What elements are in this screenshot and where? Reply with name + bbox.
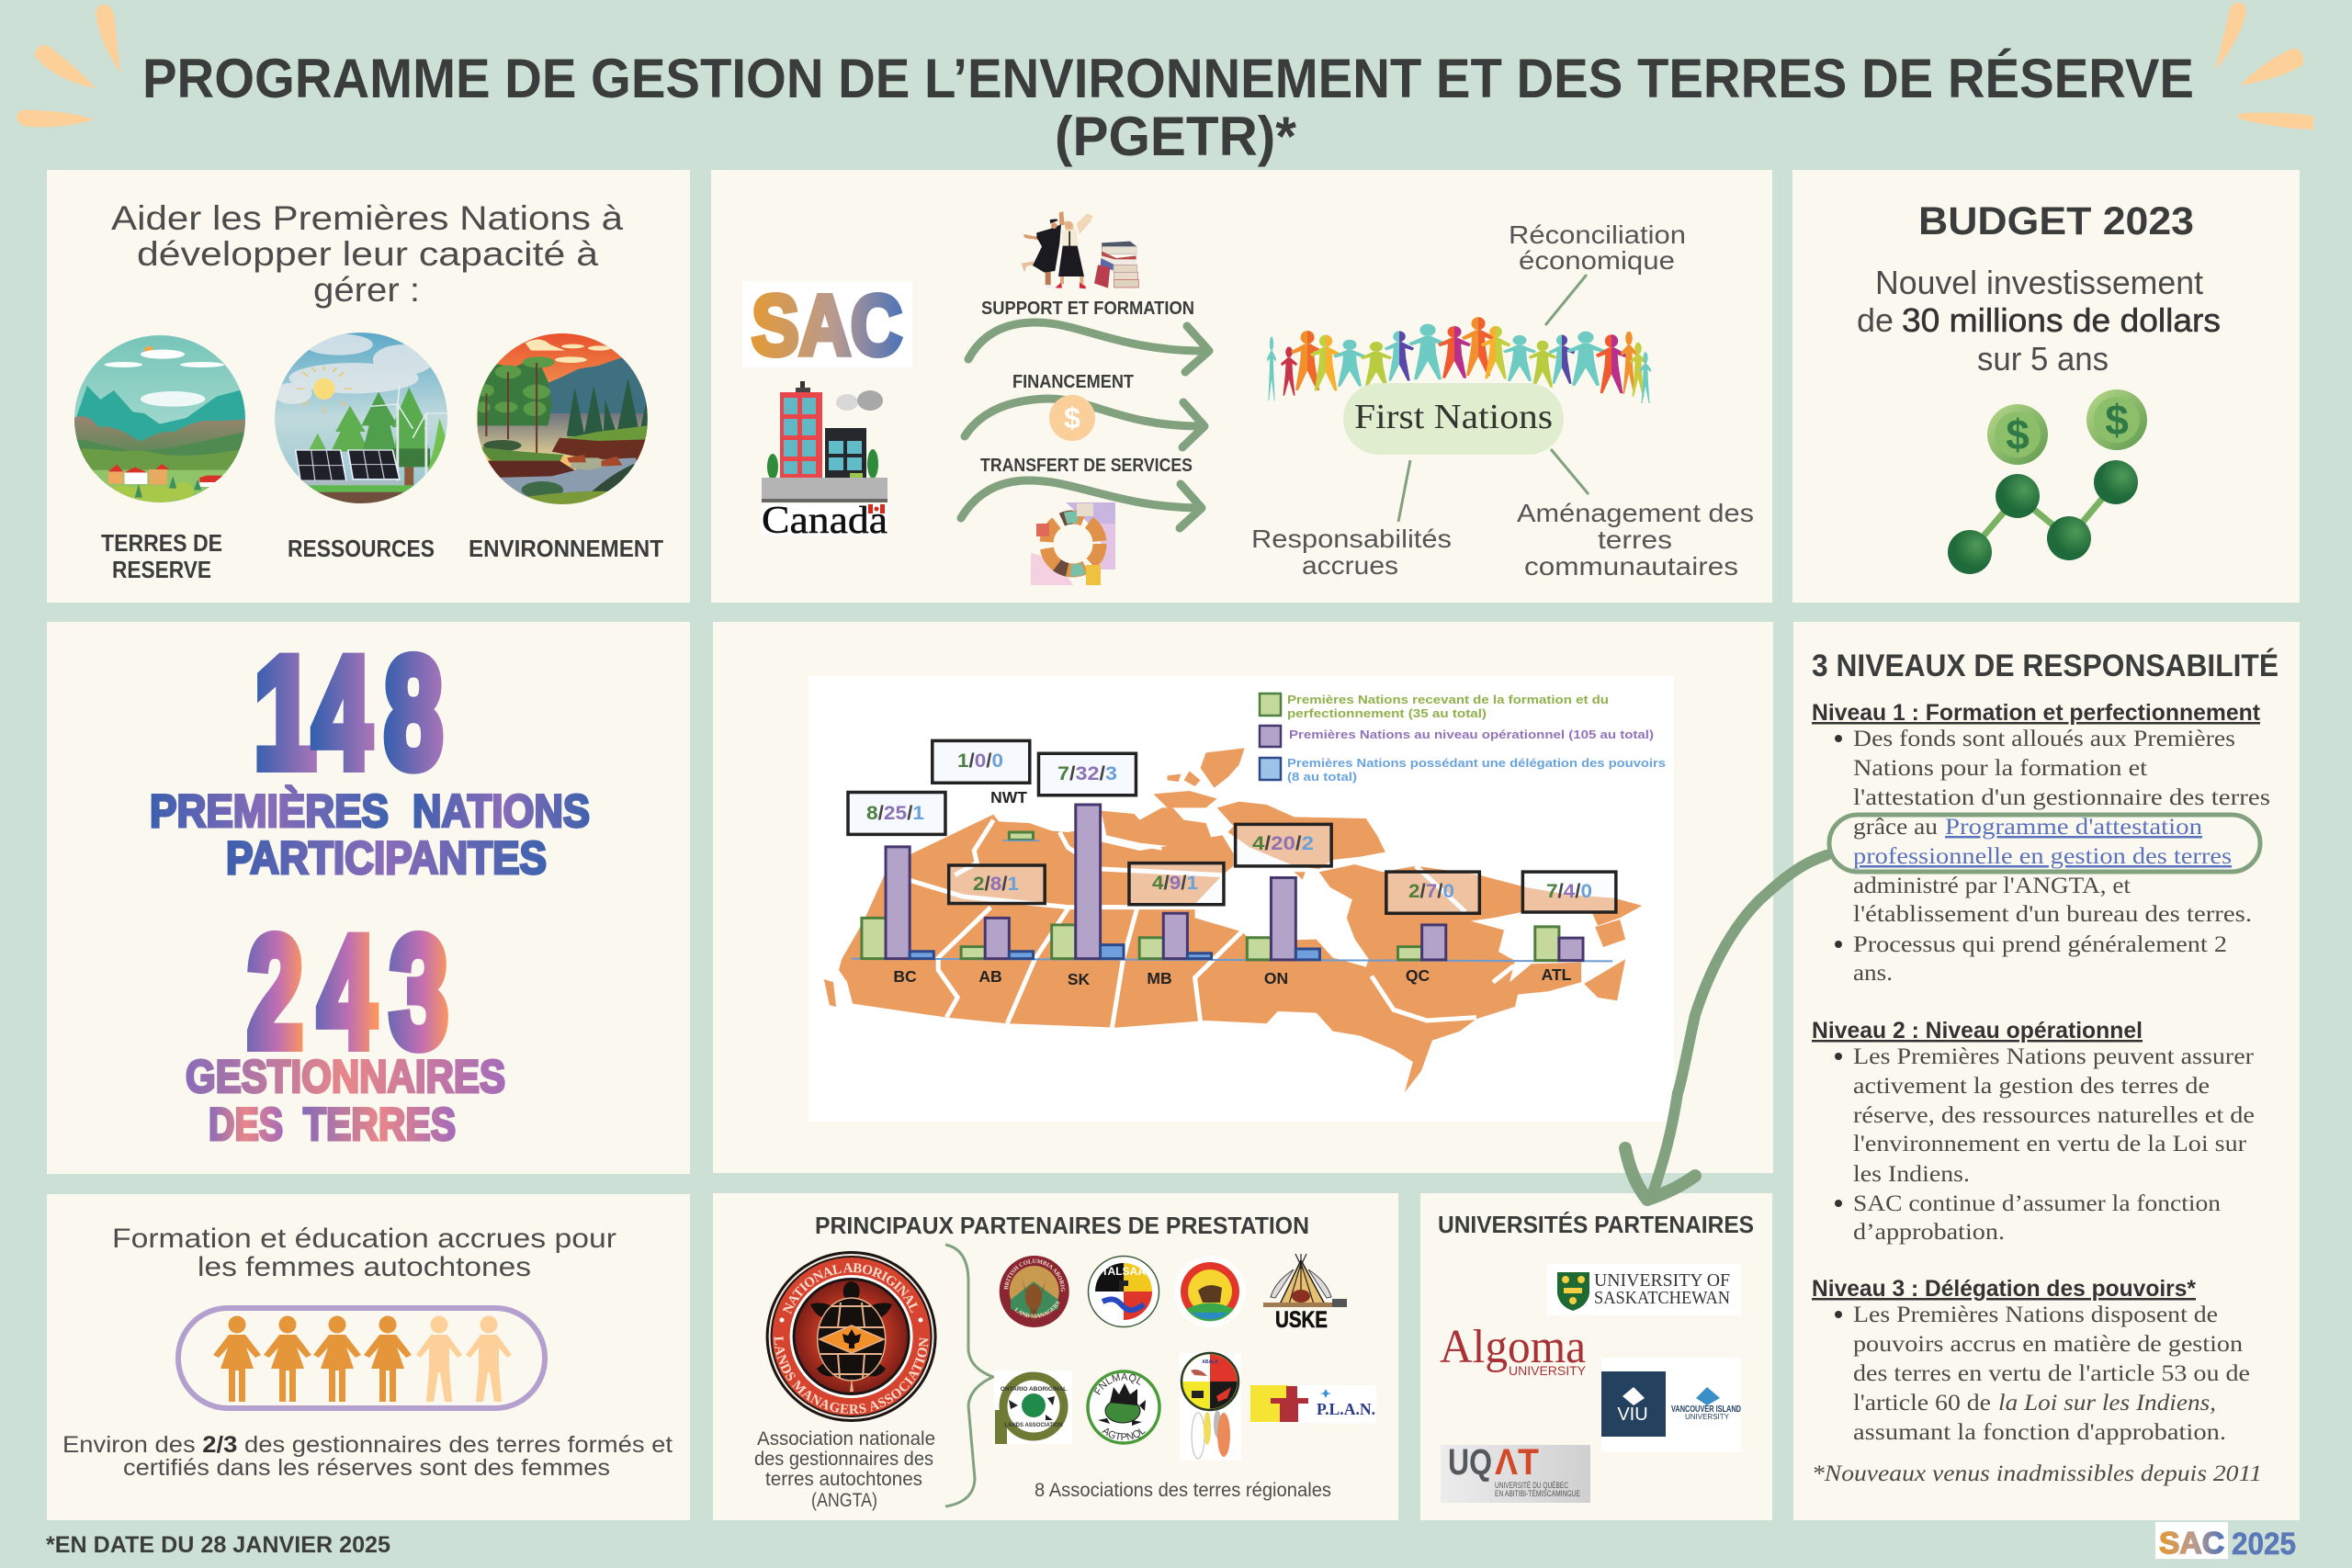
icon: money growth chart: $ [2006, 411, 2030, 458]
data labels: box values: 7/32/3 [1057, 763, 1117, 784]
data labels: regions: AB [978, 967, 1002, 986]
text: ANGTA caption: terres autochtones [765, 1469, 922, 1490]
data labels: regions: ATL [1542, 965, 1572, 984]
logo: SAC 2025: 2025 [2232, 1527, 2296, 1562]
callout: responsabilites [1251, 525, 1452, 580]
label: ressources: RESSOURCES [288, 535, 435, 562]
label: premieres nations participantes [150, 785, 590, 884]
logo: PLAN: P.L.A.N. [1317, 1400, 1375, 1418]
logo: UQAT: UQ [1448, 1442, 1492, 1483]
stat: 148: 4 [312, 625, 371, 801]
icon: circle of hands [1031, 502, 1115, 585]
text: niveau 1: grâce au [1853, 815, 1939, 840]
panel: flows to First Nations [711, 170, 1772, 603]
stat: 148: 8 [384, 625, 443, 801]
arrow: transfert de services [961, 480, 1202, 528]
callout: reconciliation [1509, 220, 1686, 275]
logo: Ontario lands association: LANDS ASSOCIATION [1004, 1423, 1063, 1428]
callout: responsabilites: accrues [1302, 551, 1398, 580]
callout: amenagement: Aménagement des [1517, 499, 1754, 527]
icon: government building [762, 381, 888, 502]
text: niveau 1: Des fonds sont alloués aux Premières [1853, 727, 2235, 751]
text: two thirds: Environ des 2/3 des gestionnaires des terres formés et [62, 1432, 673, 1458]
label: terres de reserve [101, 529, 222, 583]
logo: SAC: SAC [752, 277, 902, 373]
footnote: nouveaux venus: *Nouveaux venus inadmissibles depuis 2011 [1812, 1461, 2262, 1486]
label: terres de reserve: RESERVE [112, 556, 211, 583]
decorative sunburst right [2215, 3, 2313, 130]
heading: formation femmes: Formation et éducation accrues pour [112, 1224, 616, 1254]
callout: amenagement: communautaires [1524, 552, 1738, 581]
label: terres de reserve: TERRES DE [101, 529, 222, 557]
text: niveau 1: administré par l'ANGTA, et [1853, 874, 2131, 898]
logo: SAC 2025: SAC [2159, 1526, 2224, 1560]
logo: ANGTA: LANDS MANAGERS ASSOCIATION [774, 1336, 929, 1415]
label: environnement: ENVIRONNEMENT [469, 535, 663, 562]
data labels: box values: 2/7/0 [1408, 881, 1454, 902]
title [142, 48, 2194, 167]
title: (PGETR)* [1055, 106, 1297, 167]
icon: terres de reserve landscape [72, 333, 247, 507]
illustration: people chain [1267, 317, 1651, 403]
text: niveau 3: l'article 60 de [1853, 1391, 1991, 1416]
text: investment [1857, 264, 2221, 378]
logo: TAL SAA [1088, 1257, 1159, 1326]
logo: TAL SAA: TALSAA [1102, 1265, 1146, 1278]
logo: Algoma: UNIVERSITY [1509, 1363, 1587, 1378]
text: niveau 3 [1812, 1276, 2250, 1445]
text: niveau 3: Les Premières Nations disposent de [1853, 1303, 2218, 1327]
logo: USKE [1263, 1254, 1347, 1333]
text: niveau 2: les Indiens. [1853, 1162, 1970, 1187]
text: two thirds: certifiés dans les réserves sont des femmes [123, 1455, 610, 1481]
logo: University of Saskatchewan: UNIVERSITY OF [1594, 1270, 1730, 1291]
data labels: box values: 7/4/0 [1546, 881, 1592, 902]
text: niveau 1 [1812, 700, 2270, 986]
logo: prairie nation [1174, 1256, 1246, 1327]
text: niveau 2: réserve, des ressources naturelles et de [1853, 1103, 2255, 1128]
text: investment: 30 millions de dollars [1902, 301, 2221, 339]
stat: 243 [247, 904, 448, 1080]
stat: 148: 1 [254, 625, 316, 801]
logo: UQAT: UNIVERSITÉ DU QUÉBEC [1495, 1481, 1568, 1490]
arrow: link to universities [1625, 855, 1826, 1200]
logo: UQAT: EN ABITIBI-TÉMISCAMINGUE [1495, 1489, 1580, 1498]
text: niveau 3: pouvoirs accrus en matière de gestion [1853, 1332, 2244, 1357]
data labels: box values [866, 750, 1592, 902]
chart: bars by region [848, 740, 1616, 961]
arrow: support et formation [968, 322, 1209, 372]
panel: stats [47, 622, 690, 1174]
panel: responsibility levels [1793, 622, 2300, 1520]
heading: capacity: Aider les Premières Nations à [111, 199, 623, 237]
logo: dreamcatcher: ABALA [1202, 1359, 1218, 1365]
text: ANGTA caption: (ANGTA) [811, 1490, 877, 1511]
data labels: regions: MB [1147, 969, 1172, 987]
panel: partners [713, 1193, 1398, 1520]
label: transfert de services: TRANSFERT DE SERVICES [980, 456, 1193, 476]
logo: Canada wordmark: Canada [762, 500, 888, 542]
heading: partners: PRINCIPAUX PARTENAIRES DE PRESTATION [815, 1212, 1309, 1239]
label: gestionnaires des terres: DES [209, 1099, 283, 1150]
heading: universities: UNIVERSITÉS PARTENAIRES [1438, 1211, 1754, 1238]
logo: USKE: USKE [1275, 1307, 1328, 1333]
icon: environnement forest [476, 333, 649, 507]
footnote: date: *EN DATE DU 28 JANVIER 2025 [46, 1532, 390, 1558]
label: gestionnaires des terres: TERRES [303, 1099, 456, 1150]
pictogram: two thirds women [178, 1308, 545, 1408]
logo: UQAT [1441, 1442, 1590, 1503]
logo: VIU: VIU [1617, 1404, 1648, 1425]
callout: amenagement [1517, 499, 1754, 581]
logo: Ontario lands association [994, 1371, 1072, 1444]
logo: UQAT: ΛT [1495, 1442, 1539, 1483]
heading: levels: 3 NIVEAUX DE RESPONSABILITÉ [1812, 649, 2278, 683]
caption: regional associations: 8 Associations des terres régionales [1035, 1480, 1331, 1501]
bubble: First Nations [1343, 383, 1564, 455]
logo: FNLMAQ: FNLMAQL [1093, 1373, 1141, 1395]
logo: ANGTA [766, 1251, 937, 1422]
text: niveau 2: Les Premières Nations peuvent assurer [1853, 1044, 2255, 1069]
logo: VIU: VANCOUVER ISLAND [1671, 1404, 1741, 1415]
connector lines [1398, 275, 1589, 522]
text: two thirds [62, 1432, 673, 1481]
logo: BC land managers [1000, 1256, 1069, 1327]
label: support et formation: SUPPORT ET FORMATION [981, 299, 1194, 319]
label: premieres nations participantes: NATIONS [413, 785, 590, 837]
stat: 243: 2 [247, 904, 303, 1080]
label: premieres nations participantes: PREMIÈRES [150, 785, 389, 837]
text: niveau 1: Nations pour la formation et [1853, 756, 2147, 781]
logo: ANGTA: NATIONAL ABORIGINAL [783, 1263, 919, 1314]
heading: capacity: gérer : [313, 271, 420, 309]
panel: women [47, 1194, 690, 1520]
logo: University of Saskatchewan [1547, 1264, 1741, 1315]
text: niveau 2: l'environnement en vertu de la Loi sur [1853, 1132, 2247, 1156]
logo: dreamcatcher [1180, 1353, 1241, 1461]
panel: capacity [47, 170, 690, 603]
highlight ellipse [1829, 815, 2260, 872]
data labels: box values: 4/20/2 [1252, 833, 1314, 854]
text: investment: sur 5 ans [1977, 340, 2109, 378]
label: gestionnaires des terres [186, 1051, 505, 1150]
text: niveau 1: ans. [1853, 961, 1893, 986]
stat: 148 [254, 625, 443, 801]
icon: graduates and books [1022, 211, 1138, 288]
text: niveau 2: Niveau 2 : Niveau opérationnel [1812, 1018, 2143, 1043]
data labels: regions: SK [1068, 970, 1091, 988]
map: Canada [824, 748, 1642, 1092]
label: financement: FINANCEMENT [1012, 372, 1134, 392]
brace [945, 1245, 993, 1506]
data labels: box values: 4/9/1 [1152, 873, 1198, 894]
data labels: box values: 1/0/0 [957, 750, 1003, 772]
heading: formation femmes: les femmes autochtones [198, 1252, 531, 1282]
text: ANGTA caption: des gestionnaires des [754, 1449, 933, 1470]
bubble: First Nations: First Nations [1354, 398, 1553, 436]
callout: reconciliation: Réconciliation [1509, 220, 1686, 249]
legend: Premières Nations possédant une délégation des pouvoirs [1287, 757, 1666, 770]
heading: capacity [111, 199, 623, 309]
panel: map [713, 622, 1773, 1173]
logo: University of Saskatchewan: SASKATCHEWAN [1594, 1288, 1730, 1308]
decorative sunburst left [17, 5, 120, 127]
text: niveau 1: Processus qui prend généralement 2 [1853, 932, 2227, 957]
icon: dollar coin [1049, 395, 1095, 441]
text: niveau 1: l'établissement d'un bureau des terres. [1853, 902, 2252, 927]
callout: responsabilites: Responsabilités [1251, 525, 1452, 553]
legend [1260, 694, 1666, 784]
text: niveau 2 [1812, 1018, 2255, 1245]
logo: PLAN [1250, 1385, 1376, 1423]
arrow: financement [965, 399, 1204, 447]
data labels: box values: 2/8/1 [973, 874, 1019, 895]
text: niveau 2: activement la gestion des terres de [1853, 1074, 2210, 1099]
data labels: box values: 8/25/1 [866, 803, 924, 824]
panel: budget [1792, 170, 2300, 603]
text: niveau 1: Programme d'attestation [1945, 815, 2203, 840]
icon: dollar coin: $ [1064, 401, 1080, 434]
panel: universities [1420, 1193, 1772, 1520]
text: niveau 3: Niveau 3 : Délégation des pouvoirs* [1812, 1276, 2196, 1302]
logo: Algoma: Algoma [1440, 1321, 1586, 1373]
icon: money growth chart: $ [2105, 396, 2129, 444]
heading: budget 2023: BUDGET 2023 [1918, 199, 2194, 243]
callout: amenagement: terres [1598, 525, 1672, 554]
stat: 243: 3 [390, 904, 448, 1080]
legend: Premières Nations au niveau opérationnel (105 au total) [1289, 728, 1654, 741]
icon: money growth chart [1948, 389, 2147, 574]
legend: (8 au total) [1287, 771, 1357, 784]
logo: VIU: UNIVERSITY [1685, 1413, 1730, 1421]
text: niveau 3: la Loi sur les Indiens, [1998, 1391, 2216, 1416]
heading: formation femmes [112, 1224, 616, 1282]
map card [808, 676, 1674, 1122]
logo: Ontario lands association: ONTARIO ABORIGINAL [1001, 1386, 1067, 1393]
text: niveau 1: Niveau 1 : Formation et perfectionnement [1812, 700, 2261, 726]
data labels: regions: ON [1264, 969, 1288, 987]
label: premieres nations participantes: PARTICIPANTES [226, 832, 547, 884]
logo: BC land managers: LAND MANAGERS [1014, 1301, 1060, 1318]
data labels: regions: NWT [990, 788, 1027, 807]
logo: BC land managers: BRITISH COLUMBIA ABORIGINAL [1003, 1258, 1066, 1292]
stat: 243: 4 [318, 904, 376, 1080]
text: niveau 1: professionnelle en gestion des terres [1853, 844, 2232, 869]
text: niveau 2: SAC continue d’assumer la fonction [1853, 1191, 2222, 1216]
title: PROGRAMME DE GESTION DE L’ENVIRONNEMENT ET DES TERRES DE RÉSERVE [142, 48, 2194, 109]
data labels: regions [893, 788, 1572, 988]
data labels: regions: QC [1406, 966, 1430, 985]
legend: Premières Nations recevant de la formation et du [1287, 694, 1609, 706]
text: investment: Nouvel investissement [1875, 264, 2203, 301]
logo: VIU [1601, 1358, 1741, 1452]
icon: ressources solar and wind [272, 331, 451, 507]
text: ANGTA caption [754, 1428, 935, 1511]
legend: perfectionnement (35 au total) [1287, 707, 1487, 720]
heading: capacity: développer leur capacité à [137, 235, 598, 273]
text: niveau 2: d’approbation. [1853, 1220, 2005, 1245]
text: niveau 1: l'attestation d'un gestionnaire des terres [1853, 785, 2270, 810]
text: ANGTA caption: Association nationale [757, 1428, 935, 1450]
logo: FNLMAQ [1086, 1370, 1161, 1445]
text: niveau 3: des terres en vertu de l'article 53 ou de [1853, 1361, 2250, 1386]
callout: reconciliation: économique [1519, 246, 1675, 275]
logo: SAC 2025 [2155, 1522, 2296, 1562]
label: gestionnaires des terres: GESTIONNAIRES [186, 1051, 505, 1102]
text: niveau 3: assumant la fonction d'approbation. [1853, 1420, 2226, 1445]
text: investment: de [1857, 301, 1894, 339]
data labels: regions: BC [893, 967, 917, 986]
logo: FNLMAQ: AGTPNQL [1102, 1427, 1146, 1440]
